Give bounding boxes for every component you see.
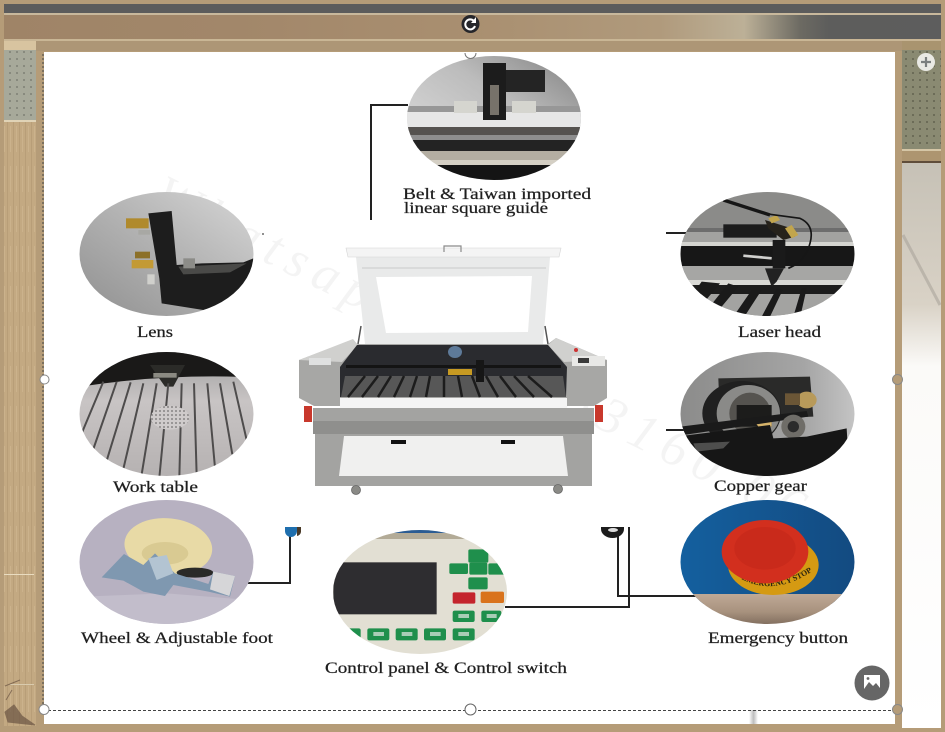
machine lid <box>346 246 561 344</box>
icon: plus button <box>917 53 935 71</box>
label: lens: Lens <box>137 324 173 341</box>
machine cutting bed <box>340 345 567 397</box>
photo: emergency button <box>680 500 854 624</box>
machine front rail <box>340 398 567 409</box>
label: copper gear: Copper gear <box>714 478 808 495</box>
photo: lens <box>78 190 256 318</box>
watermark: Whatsapp:86 1 53160 06 <box>145 165 814 537</box>
machine lower body <box>313 408 594 486</box>
label: wheel and adjustable foot: Wheel & Adjustable foot <box>81 630 274 647</box>
machine upper body <box>299 338 607 406</box>
photo: laser head <box>678 190 858 320</box>
label: emergency button: Emergency button <box>708 630 848 647</box>
photo: wheel and adjustable foot <box>78 498 256 630</box>
connector end caps <box>285 527 624 538</box>
laser machine <box>299 246 607 494</box>
label: belt and guide: linear square guide <box>404 200 548 217</box>
machine casters <box>352 484 562 494</box>
label: laser head: Laser head <box>738 324 821 341</box>
label: control panel: Control panel & Control switch <box>325 660 567 677</box>
label: belt and guide: Belt & Taiwan imported <box>403 186 591 203</box>
icon: rotate handle <box>462 15 480 33</box>
faint smudge at panel bottom <box>749 710 758 724</box>
label: work table: Work table <box>113 479 198 496</box>
icon: image button <box>854 666 890 700</box>
photo: work table <box>80 352 254 476</box>
photo: control panel <box>331 528 509 658</box>
photo: emergency button: EMERGENCY STOP <box>741 568 810 586</box>
photo: copper gear <box>680 352 854 476</box>
machine red side handles <box>304 405 603 422</box>
photo: belt and linear guide <box>405 55 585 183</box>
connector lines <box>248 105 696 607</box>
label: belt and guide <box>403 186 591 217</box>
